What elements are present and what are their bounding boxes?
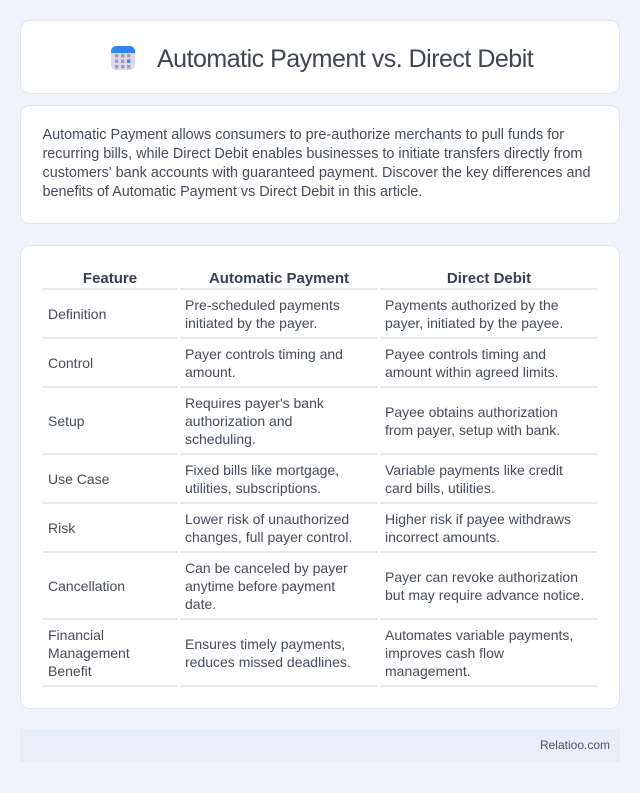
- footer: [20, 729, 620, 762]
- row: Definition: Pre-scheduled payments: [185, 297, 340, 313]
- row: Setup: Payee obtains authorization: [385, 404, 558, 420]
- row: Definition: Definition: [48, 306, 106, 322]
- row: Setup: Setup: [48, 413, 85, 429]
- row: Setup: Requires payer's bank: [185, 395, 324, 411]
- footer text: Relatioo.com: Relatioo.com: [540, 738, 610, 752]
- table header: Automatic Payment: Automatic Payment: [209, 270, 349, 287]
- row: Control: [48, 346, 559, 380]
- row: Use Case: [48, 462, 563, 496]
- row: Financial Management Benefit: management.: [385, 663, 471, 679]
- intro text: [42, 127, 591, 200]
- row: Financial Management Benefit: [48, 627, 573, 679]
- row: Definition: initiated by the payer.: [185, 315, 317, 331]
- intro text: Automatic Payment allows consumers to pre-authorize merchants to pull funds for: [42, 127, 564, 143]
- row: Financial Management Benefit: Financial: [48, 627, 104, 643]
- table header: Direct Debit: Direct Debit: [447, 270, 531, 287]
- row: Financial Management Benefit: Management: [48, 645, 130, 661]
- row: Risk: Risk: [48, 520, 75, 536]
- table header: Feature: Feature: [83, 270, 137, 287]
- row: Setup: [48, 395, 560, 447]
- intro text: recurring bills, while Direct Debit enables businesses to initiate transfers directly from: [42, 146, 582, 162]
- title: Automatic Payment vs. Direct Debit: [157, 45, 533, 73]
- intro text: benefits of Automatic Payment vs Direct Debit in this article.: [42, 184, 422, 200]
- icon: calendar: [111, 46, 135, 70]
- row: Control: Control: [48, 355, 93, 371]
- row: Definition: [48, 297, 563, 331]
- row: Financial Management Benefit: reduces missed deadlines.: [185, 654, 351, 670]
- row: Control: Payee controls timing and: [385, 346, 546, 362]
- panel: comparison table: [20, 245, 620, 709]
- row: Cancellation: date.: [185, 596, 216, 612]
- row: Setup: authorization and: [185, 413, 292, 429]
- intro text: customers' bank accounts with guaranteed payment. Discover the key differences and: [42, 165, 591, 181]
- row: Control: amount within agreed limits.: [385, 364, 559, 380]
- row: Control: Payer controls timing and: [185, 346, 343, 362]
- row: Cancellation: but may require advance notice.: [385, 587, 584, 603]
- row: Cancellation: Can be canceled by payer: [185, 560, 348, 576]
- row: Financial Management Benefit: Automates variable payments,: [385, 627, 573, 643]
- row: Use Case: card bills, utilities.: [385, 480, 495, 496]
- row: Setup: scheduling.: [185, 431, 256, 447]
- row: Control: amount.: [185, 364, 236, 380]
- row: Cancellation: [48, 560, 584, 612]
- row: Financial Management Benefit: Benefit: [48, 663, 92, 679]
- panel: title header: [20, 20, 620, 94]
- row: Risk: changes, full payer control.: [185, 529, 352, 545]
- row: Use Case: utilities, subscriptions.: [185, 480, 321, 496]
- row: Definition: Payments authorized by the: [385, 297, 559, 313]
- row: Risk: Lower risk of unauthorized: [185, 511, 349, 527]
- row: Risk: incorrect amounts.: [385, 529, 500, 545]
- row: Risk: [48, 511, 571, 545]
- row: Risk: Higher risk if payee withdraws: [385, 511, 571, 527]
- row: Financial Management Benefit: improves cash flow: [385, 645, 504, 661]
- row: Use Case: Variable payments like credit: [385, 462, 563, 478]
- row: Cancellation: anytime before payment: [185, 578, 335, 594]
- row: Use Case: Use Case: [48, 471, 109, 487]
- row: Definition: payer, initiated by the payee.: [385, 315, 563, 331]
- panel: introduction: [20, 105, 620, 224]
- row: Setup: from payer, setup with bank.: [385, 422, 560, 438]
- row: Use Case: Fixed bills like mortgage,: [185, 462, 339, 478]
- row: Financial Management Benefit: Ensures timely payments,: [185, 636, 345, 652]
- row: Cancellation: Cancellation: [48, 578, 125, 594]
- row: Cancellation: Payer can revoke authorization: [385, 569, 578, 585]
